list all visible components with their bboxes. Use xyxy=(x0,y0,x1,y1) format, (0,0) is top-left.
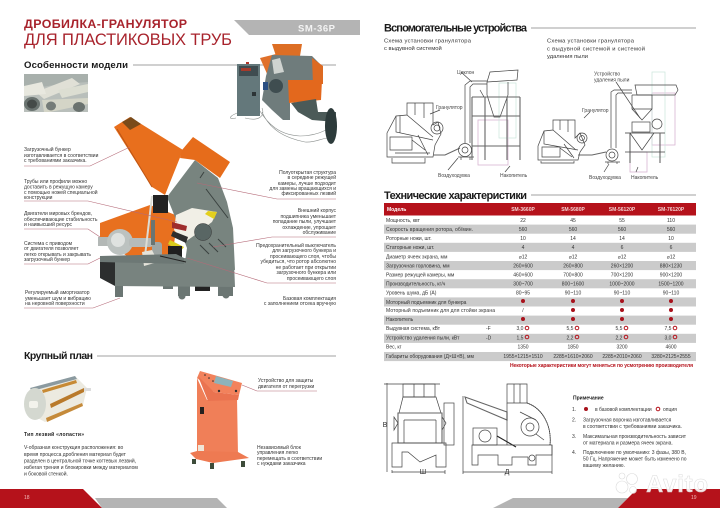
title xyxy=(24,17,232,49)
column SM-76120P: 3,0 xyxy=(665,335,672,341)
row labels: Уровень шума, дБ (А) xyxy=(386,291,437,297)
callout: damper: уменьшает шум и вибрацию xyxy=(25,296,91,302)
column SM-5680P: 700×800 xyxy=(563,272,583,278)
row stripes xyxy=(384,225,696,361)
notes: 3. xyxy=(572,434,576,440)
caption: scheme one xyxy=(384,38,472,52)
notes: в соответствии с требованиями заказчика. xyxy=(583,424,682,430)
callout: safety switch: загрузочного бункера или xyxy=(276,270,336,276)
column SM-56120P: 2,2 xyxy=(616,335,623,341)
column SM-56120P: 90~110 xyxy=(614,291,630,297)
motor and drive xyxy=(98,237,109,246)
table note: Некоторые характеристики могут меняться по усмотрению производителя xyxy=(510,363,693,369)
callout: motors: и наивысший ресурс xyxy=(24,221,73,228)
callout: drive system: Система с приводом xyxy=(24,241,73,247)
drawing: front view xyxy=(384,383,454,474)
row labels: Диаметр ячеек экрана, мм xyxy=(386,254,448,260)
optional markers xyxy=(525,326,677,339)
row labels: Выдувная система, кВт xyxy=(386,326,441,332)
callout: control unit: управления легко xyxy=(257,450,298,456)
rear orange casing xyxy=(100,205,178,258)
callout: drive system: от двигателя позволяет xyxy=(24,246,79,252)
feet xyxy=(115,283,233,300)
notes: 50 Гц. Напряжение может быть изменено по xyxy=(583,456,687,462)
callout: bearing housing: Внешний корпус xyxy=(298,207,336,214)
diagram labels two: Воздуходувка xyxy=(589,175,621,181)
column SM-56120P: 55 xyxy=(619,218,625,224)
callout: semi-open structure: фиксированных лезвий xyxy=(281,190,336,197)
footer right xyxy=(493,489,720,508)
drawing label: height: В xyxy=(383,422,388,429)
machine base xyxy=(100,258,235,287)
drawing label: length: Д xyxy=(505,469,510,476)
column SM-3660P: 1955×1215×1510 xyxy=(503,354,543,360)
column SM-56120P: 560 xyxy=(618,227,626,233)
row labels: Вес, кг xyxy=(386,344,402,350)
column SM-5680P: 260×800 xyxy=(563,263,583,269)
callout: bearing housing: подшипника уменьшает xyxy=(280,214,337,220)
row labels: -D xyxy=(486,335,492,341)
notes: опция xyxy=(663,407,677,413)
notes: вашему желанию. xyxy=(583,463,625,469)
callout: overload protection: Устройство для защиты xyxy=(258,377,314,384)
column SM-56120P: 260×1200 xyxy=(611,263,633,269)
column SM-76120P: 110 xyxy=(667,218,675,224)
callout: bearing housing: попадание пыли, улучшает xyxy=(273,219,337,225)
callout: basic equipment xyxy=(264,296,336,307)
heading: auxiliary devices: Вспомогательные устройства xyxy=(384,22,528,34)
table header: SM-3660P xyxy=(511,207,535,213)
title: ДРОБИЛКА-ГРАНУЛЯТОР xyxy=(24,17,187,31)
heading: technical specs: Технические характеристики xyxy=(384,190,527,202)
caption: scheme two xyxy=(547,38,645,60)
rotor opening xyxy=(174,208,217,242)
column SM-76120P: 10 xyxy=(668,236,674,242)
callout: safety switch: для загрузочного бункера и xyxy=(272,248,336,254)
caption: scheme one: Схема установки гранулятора xyxy=(384,38,472,44)
row labels: Роторные ножи, шт. xyxy=(386,236,432,242)
legend: optional xyxy=(656,407,660,411)
column SM-3660P: 300~700 xyxy=(513,282,533,288)
column SM-56120P: ⌀12 xyxy=(618,254,627,260)
diagram labels two: удаления пыли xyxy=(594,78,630,84)
column SM-5680P: 560 xyxy=(569,227,577,233)
column SM-3660P: 1350 xyxy=(517,344,529,350)
column SM-76120P: 6 xyxy=(670,245,673,251)
column SM-5680P: 45 xyxy=(570,218,576,224)
column SM-3660P: 1,5 xyxy=(517,335,524,341)
diagram labels one xyxy=(436,70,528,179)
callout: safety switch: просеивающего слоя xyxy=(287,276,336,282)
callout: bearing housing xyxy=(213,207,337,247)
diagram labels two: Накопитель xyxy=(631,175,659,181)
column SM-56120P: 2285×2010×2060 xyxy=(602,354,642,360)
callout: control unit: Независимый блок xyxy=(257,444,302,451)
column SM-3660P: 80~95 xyxy=(516,291,530,297)
main hopper xyxy=(114,117,183,195)
column SM-3660P: 460×600 xyxy=(513,272,533,278)
callout: pipes: конструкции xyxy=(24,195,53,201)
column SM-3660P: ⌀12 xyxy=(519,254,528,260)
caption: scheme one: с выдувной системой xyxy=(384,45,442,52)
illustration: granulator cutaway xyxy=(98,117,235,300)
illustration: control cabinet xyxy=(190,371,249,469)
callout: pipes: доставить в режущую камеру xyxy=(24,184,93,190)
column SM-3660P xyxy=(503,218,543,360)
diagram: blower system xyxy=(387,70,520,172)
column SM-3660P: 4 xyxy=(522,245,525,251)
column SM-5680P: 5,5 xyxy=(567,326,574,332)
text: blade type: Тип лезвий «лопасти» xyxy=(24,431,84,438)
caption: scheme two: с выдувной системой и системой xyxy=(547,46,645,52)
row labels: Габариты оборудования (Д×Ш×В), мм xyxy=(386,354,474,360)
callout: semi-open structure: для замены вращающихся и xyxy=(269,186,336,192)
column SM-3660P: / xyxy=(522,308,524,314)
column SM-3660P: 3,0 xyxy=(517,326,524,332)
diagram labels one: Гранулятор xyxy=(436,105,463,111)
legend: included xyxy=(584,407,588,411)
column SM-3660P: 10 xyxy=(520,236,526,242)
callout: semi-open structure: камеры, лучше подходит xyxy=(278,181,337,187)
callout: pipes: с помощью ножей специальной xyxy=(24,189,98,196)
callout: drive system xyxy=(24,241,100,264)
callout: basic equipment: Базовая комплектация xyxy=(283,296,336,302)
notes: Примечание xyxy=(573,396,604,402)
column SM-5680P: 2285×1610×2060 xyxy=(553,354,593,360)
column SM-76120P: ⌀12 xyxy=(667,254,676,260)
row labels: Загрузочная горловина, мм xyxy=(386,263,450,269)
callout: motors xyxy=(24,211,100,237)
column SM-5680P xyxy=(553,218,593,360)
callout: pipes: Трубы или профили можно xyxy=(24,179,87,185)
column SM-56120P: 14 xyxy=(619,236,625,242)
column SM-3660P: 260×600 xyxy=(513,263,533,269)
footer left: 18 xyxy=(24,495,30,501)
row labels: Устройство удаления пыли, кВт xyxy=(386,334,460,341)
callout: hopper xyxy=(24,146,130,166)
notes: от материала и размера ячеек экрана. xyxy=(583,440,673,446)
row labels xyxy=(386,218,495,360)
row labels: Статорные ножи, шт. xyxy=(386,245,434,251)
row labels: Мощность, квт xyxy=(386,218,421,224)
callout: safety switch: убедиться, что ротор абсолютно xyxy=(261,259,336,265)
diagram labels one: Воздуходувка xyxy=(438,173,470,179)
callout: pipes xyxy=(24,179,177,222)
diagram: blower and dust removal xyxy=(538,72,678,172)
callout: motors: Двигатели мировых брендов, xyxy=(24,211,92,217)
column SM-56120P: 5,5 xyxy=(616,326,623,332)
table header: Модель xyxy=(387,207,406,213)
row labels: Накопитель xyxy=(386,317,414,323)
photo: granulator with control cabinet xyxy=(230,44,337,144)
column SM-56120P: 3200 xyxy=(616,344,628,350)
footer right: 19 xyxy=(691,495,697,501)
column SM-56120P xyxy=(602,218,642,360)
callout: motors: обеспечивающие стабильность xyxy=(24,217,98,223)
table header xyxy=(384,203,696,216)
text: blade type: и боковой стенкой. xyxy=(24,470,68,478)
footer left xyxy=(0,489,227,508)
heading: model features: Особенности модели xyxy=(24,60,128,71)
column SM-56120P: 700×1200 xyxy=(611,272,633,278)
column SM-76120P: 900×1200 xyxy=(660,272,682,278)
callout: safety switch: просеивающего слоя, чтобы xyxy=(270,254,336,260)
column SM-76120P: 1500~1200 xyxy=(658,282,684,288)
callout: drive system: легко открывать и закрывать xyxy=(24,252,91,258)
column SM-3660P: 560 xyxy=(519,227,527,233)
column SM-56120P: 6 xyxy=(621,245,624,251)
notes: 2. xyxy=(572,418,576,424)
row labels: -F xyxy=(486,326,491,332)
diagram labels two xyxy=(582,70,659,181)
table header: SM-76120P xyxy=(658,207,685,213)
callout: safety switch: не работает при открытии xyxy=(276,265,336,271)
text: blade type: V-образная конструкция расположения: во xyxy=(24,445,123,451)
callout: control unit: с нуждами заказчика xyxy=(257,461,306,467)
row labels: Моторный подъемник для бункера xyxy=(386,299,467,306)
row labels: Производительность, кг/ч xyxy=(386,282,446,288)
column SM-76120P xyxy=(651,218,691,360)
callout: basic equipment: с заполнением отсека вручную xyxy=(264,301,336,307)
callout: hopper: с требованиями заказчика. xyxy=(24,158,87,164)
model badge xyxy=(234,20,360,35)
callout: safety switch: Предохранительный выключатель xyxy=(256,242,336,249)
caption: scheme two: Схема установки гранулятора xyxy=(547,38,635,44)
column SM-76120P: 7,5 xyxy=(665,326,672,332)
table header: SM-5680P xyxy=(561,207,585,213)
included markers xyxy=(521,299,673,321)
column SM-5680P: 90~110 xyxy=(565,291,581,297)
column SM-56120P: 1000~2000 xyxy=(609,282,635,288)
column SM-5680P: 2,2 xyxy=(567,335,574,341)
specs table xyxy=(384,203,696,361)
column SM-76120P: 4600 xyxy=(665,344,677,350)
callout: semi-open structure: Полуоткрытая структура xyxy=(279,170,336,176)
column SM-5680P: 800~1600 xyxy=(562,282,584,288)
callout: hopper: Загрузочный бункер xyxy=(24,146,71,153)
callout: control unit: перемещать в соответствии xyxy=(257,456,322,462)
callout: bearing housing: обслуживание xyxy=(303,230,336,236)
heading: close-up: Крупный план xyxy=(24,350,93,362)
drawing label: width: Ш xyxy=(420,469,426,476)
diagram labels one: Циклон xyxy=(457,70,474,76)
watermark: Avito xyxy=(616,471,708,498)
photo: plastic pipes xyxy=(24,74,88,112)
callout: control unit xyxy=(257,444,322,467)
row labels: Размер режущей камеры, мм xyxy=(386,272,455,278)
callout: overload protection: двигателя от перегрузки xyxy=(258,384,315,390)
notes: Загрузочная воронка изготавливается xyxy=(583,418,672,424)
callout: drive system: загрузочный бункер xyxy=(24,256,70,263)
diagram labels two: Устройство xyxy=(594,70,620,78)
diagram labels two: Гранулятор xyxy=(582,108,609,114)
column SM-76120P: 560 xyxy=(667,227,675,233)
callout: semi-open structure: в середине режущей xyxy=(288,174,336,181)
callout: damper: Регулируемый амортизатор xyxy=(25,289,90,296)
row labels: Моторный подъемник для для стойки экрана xyxy=(386,307,495,314)
illustration: blade rotor xyxy=(24,376,91,422)
callout: overload protection xyxy=(242,377,317,391)
notes: в базовой комплектации xyxy=(595,406,652,413)
text: blade type: избегая трения и блокировки между материалом xyxy=(24,465,138,471)
row labels: Скорость вращения ротора, об/мин. xyxy=(386,227,473,233)
gray body xyxy=(167,160,235,270)
notes: 4. xyxy=(572,450,576,456)
column SM-3660P: 22 xyxy=(520,218,526,224)
model badge: SM-36P xyxy=(298,24,336,34)
text: blade type: разделен в центральной точке когтевых лезвий, xyxy=(24,458,136,464)
text: blade type xyxy=(24,431,138,478)
column SM-76120P: 3280×2125×2555 xyxy=(651,354,691,360)
column SM-5680P: 1850 xyxy=(567,344,579,350)
title: ДЛЯ ПЛАСТИКОВЫХ ТРУБ xyxy=(24,31,232,49)
callout: bearing housing: охлаждение, упрощает xyxy=(282,225,337,231)
caption: scheme two: удаления пыли xyxy=(547,54,588,60)
notes xyxy=(572,396,687,469)
table header: SM-56120P xyxy=(609,207,636,213)
callout: safety switch xyxy=(187,242,336,283)
notes: Подключение по умолчанию: 3 фазы, 380 В, xyxy=(583,450,686,456)
callout: semi-open structure xyxy=(197,170,337,199)
column SM-76120P: 880×1230 xyxy=(660,263,682,269)
notes: Максимальная производительность зависит xyxy=(583,434,687,440)
callout: damper xyxy=(24,289,120,308)
column SM-5680P: ⌀12 xyxy=(569,254,578,260)
callout: damper: на неровной поверхности xyxy=(25,300,85,307)
callout: hopper: изготавливается в соответствии xyxy=(24,153,99,159)
diagram labels one: Накопитель xyxy=(500,173,528,179)
watermark: Avito: Avito xyxy=(646,471,708,498)
notes: 1. xyxy=(572,407,576,413)
column SM-5680P: 4 xyxy=(572,245,575,251)
column SM-5680P: 14 xyxy=(570,236,576,242)
drawing: side view xyxy=(463,384,552,474)
text: blade type: время процесса дробления материал будет xyxy=(24,452,127,458)
column SM-76120P: 90~110 xyxy=(663,291,679,297)
